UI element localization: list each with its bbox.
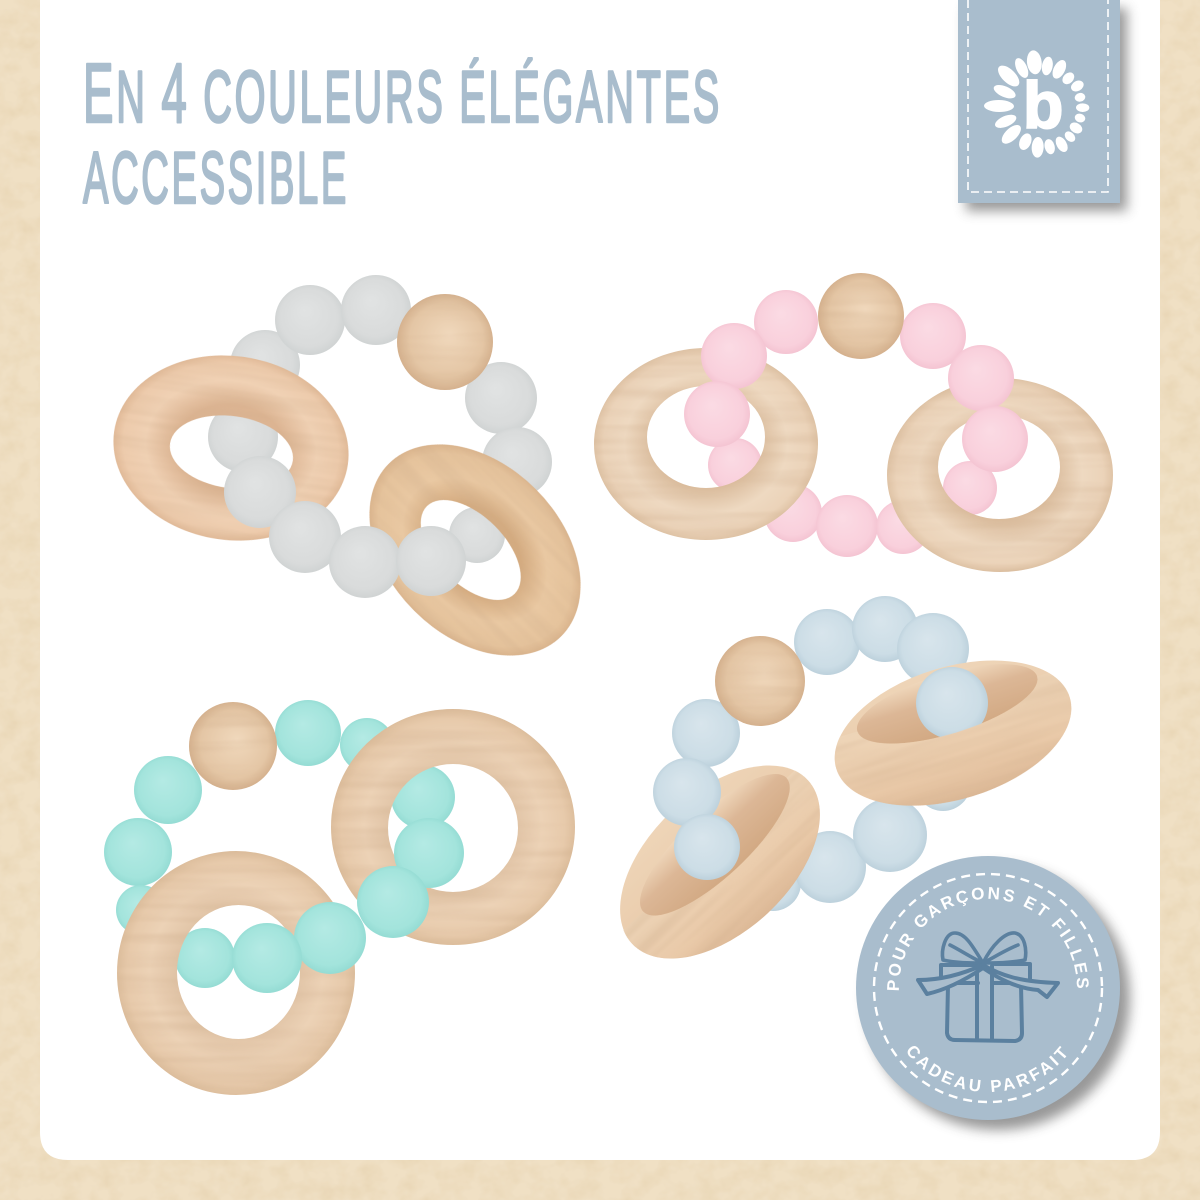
wood ring top right: far rim <box>817 634 1089 832</box>
wood ring left <box>101 340 361 556</box>
wood ring top right: near rim <box>828 669 1089 832</box>
mint beads in front <box>232 818 464 993</box>
pink beads in front <box>684 323 1028 472</box>
title: ACCESSIBLE <box>83 138 349 219</box>
mint beads behind rings <box>104 700 455 988</box>
wood ring right <box>887 378 1113 572</box>
badge text top: POUR GARÇONS ET FILLES <box>887 887 1089 990</box>
wood ring left <box>594 348 818 540</box>
gray beads behind rings <box>208 275 552 563</box>
gray beads in front <box>224 456 466 598</box>
teether: blue <box>584 596 1089 995</box>
title: EN 4 COULEURS ÉLÉGANTES <box>83 46 722 140</box>
badge text bottom: CADEAU PARFAIT <box>908 1046 1066 1092</box>
wood ring right <box>331 709 575 945</box>
teether: gray <box>101 275 622 697</box>
wood ring left <box>117 851 355 1095</box>
teether: mint <box>104 700 575 1095</box>
pink beads behind rings <box>708 273 997 557</box>
icon: sun petals logo: b <box>1023 68 1063 142</box>
wood ring bottom left: far rim <box>584 729 856 995</box>
blue beads behind rings <box>672 596 971 911</box>
blue beads threaded through rings <box>653 667 988 880</box>
wood ring right <box>328 403 622 697</box>
icon: gift box <box>918 933 1058 1041</box>
title <box>83 46 722 219</box>
teether: pink <box>594 273 1113 572</box>
wood ring bottom left: near rim <box>621 768 855 995</box>
icon: sun petals logo <box>984 50 1089 158</box>
logo tag <box>958 0 1127 211</box>
badge: perfect gift <box>856 856 1138 1138</box>
